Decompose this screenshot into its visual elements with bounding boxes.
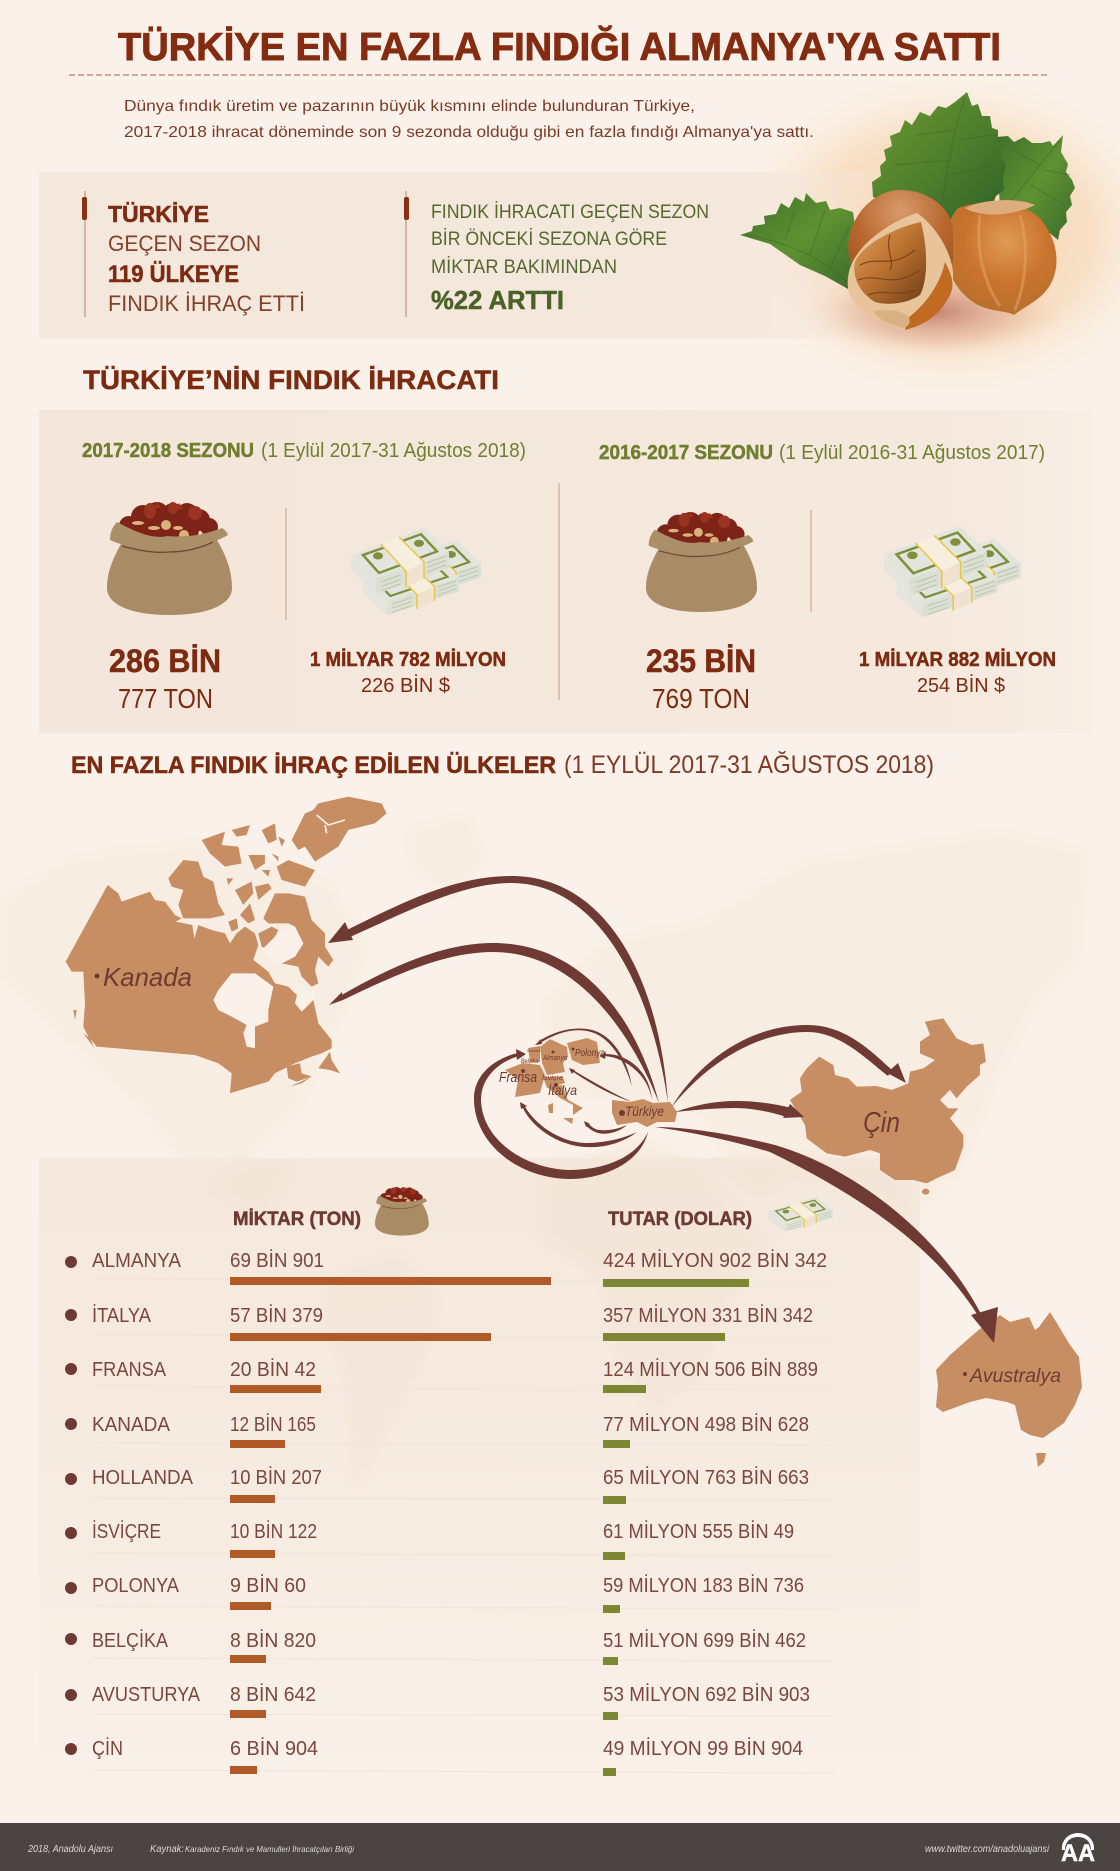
icon: money stacks [351,528,481,615]
season heading: (1 Eylül 2016-31 Ağustos 2017) [779,442,1045,464]
row: Fransa: 20 BİN 42 [230,1358,316,1381]
arrow: to Netherlands [535,1028,632,1087]
value [310,648,506,697]
label: Kanada: Kanada [103,962,192,992]
value [859,648,1056,697]
icon: sack of hazelnuts [107,502,232,615]
value: 254 BİN $ [917,674,1005,697]
arrow: to Canada 1 [328,876,668,1103]
icon: money stacks [884,526,1020,618]
decorative glow behind hazelnuts [710,60,1120,410]
row: İtalya: 57 BİN 379 [230,1304,323,1327]
row: Polonya: POLONYA [92,1575,180,1597]
row: Almanya [65,1249,833,1287]
row: Hollanda: 65 MİLYON 763 BİN 663 [603,1466,809,1489]
row: Avusturya: 8 BİN 642 [230,1683,316,1706]
country labels: Türkiye [625,1103,664,1119]
panel: seasons [39,410,1092,733]
row: Hollanda [65,1466,833,1504]
quantity: 235 BİN [646,643,756,679]
header: quantity: MİKTAR (TON) [233,1209,361,1230]
footer: copyright: 2018, Anadolu Ajansı [27,1844,113,1855]
text block: export rise: MİKTAR BAKIMINDAN [431,257,617,278]
season heading: 2017-2018 SEZONU [82,440,254,462]
quantity: 286 BİN [109,643,221,679]
arrow: to Belgium [520,1102,637,1147]
row: Almanya: ALMANYA [92,1250,182,1272]
logo: AA: AA [1061,1840,1095,1867]
country labels: Hollanda [527,1048,541,1053]
row: İsviçre: 10 BİN 122 [230,1520,317,1543]
heading: Türkiye's hazelnut exports: TÜRKİYE’NİN FINDIK İHRACATI [83,365,499,395]
row: Avusturya [65,1683,833,1720]
season heading: (1 Eylül 2017-31 Ağustos 2018) [261,440,526,462]
label: Çin: Çin [863,1107,900,1139]
text block: 119 countries: FINDIK İHRAÇ ETTİ [108,291,305,316]
row: İtalya: İTALYA [92,1304,152,1327]
table: country rows [65,1249,833,1776]
value: 226 BİN $ [361,674,450,697]
row: Avusturya: AVUSTURYA [92,1684,201,1706]
country labels: Polonya [575,1048,605,1059]
map: Canada [66,797,387,1093]
row: İsviçre: 61 MİLYON 555 BİN 49 [603,1520,794,1543]
footer [0,1823,1120,1871]
country labels: İtalya [548,1082,577,1098]
quantity: 777 TON [118,683,213,714]
country labels: Fransa [499,1069,537,1086]
season 2017-2018 [82,440,526,714]
arrow: to China north [671,1025,906,1108]
country labels: İsviçre [542,1074,563,1082]
map: Europe and Türkiye [499,1038,677,1127]
intro text: 2017-2018 ihracat döneminde son 9 sezonda olduğu gibi en fazla fındığı Almanya'ya sattı. [124,124,814,141]
heading: top destination countries [71,750,934,779]
row: Kanada: 12 BİN 165 [230,1413,316,1436]
header: quantity [233,1187,429,1236]
text block: 119 countries: 119 ÜLKEYE [108,261,239,288]
quantity [109,643,221,714]
arrow: to France, long loop [474,1049,648,1179]
heading: top destination countries: (1 EYLÜL 2017-31 AĞUSTOS 2018) [564,750,934,779]
row: Fransa [65,1358,833,1393]
row: İtalya [65,1304,833,1341]
arrow: to Poland [599,1052,652,1100]
text block: export rise: BİR ÖNCEKİ SEZONA GÖRE [431,229,667,250]
row: Hollanda: 10 BİN 207 [230,1466,322,1489]
row: Polonya: 59 MİLYON 183 BİN 736 [603,1574,804,1597]
row: Almanya: 424 MİLYON 902 BİN 342 [603,1249,827,1272]
text block: export rise: FINDIK İHRACATI GEÇEN SEZON [431,202,709,223]
country labels [499,1048,664,1119]
season heading [82,440,526,462]
panel: table background [39,1158,920,1800]
season heading: 2016-2017 SEZONU [599,442,773,464]
bays and straits [213,815,345,1048]
arrow: to Canada 2 [329,943,659,1103]
header: value: TUTAR (DOLAR) [608,1209,752,1230]
faint world map inside table panel [200,1158,920,1490]
intro text [124,98,814,141]
intro text: Dünya fındık üretim ve pazarının büyük kısmını elinde bulunduran Türkiye, [124,98,695,115]
row: Belçika: 51 MİLYON 699 BİN 462 [603,1629,806,1652]
row: Çin: 6 BİN 904 [230,1737,318,1760]
arrow: to Germany [569,1068,632,1102]
arrows from Türkiye [328,876,998,1343]
text block: export rise [404,191,709,317]
hazelnut: open shell with kernel [848,190,953,295]
table headers [233,1187,833,1236]
row: Çin: 49 MİLYON 99 BİN 904 [603,1737,803,1760]
row: Fransa: FRANSA [92,1359,167,1381]
footer: source: Kaynak: [150,1844,184,1855]
header: value [608,1197,833,1232]
value: 1 MİLYAR 782 MİLYON [310,648,506,671]
faint world map background [0,810,1090,1490]
season heading [599,442,1045,464]
row: Belçika [65,1629,833,1665]
text block: 119 countries [82,191,305,317]
title: TÜRKİYE EN FAZLA FINDIĞI ALMANYA'YA SATTI [118,25,1001,69]
arrow: to Italy [584,1121,627,1134]
country labels: Almanya [542,1055,567,1062]
hazelnut: whole [945,202,1056,315]
row: Almanya: 69 BİN 901 [230,1249,324,1272]
map: China [790,1018,986,1195]
label: Avustralya: Avustralya [969,1366,1061,1387]
panel: summary [39,172,919,339]
quantity: 769 TON [652,683,750,714]
row: Hollanda: HOLLANDA [92,1467,194,1489]
row: İtalya: 357 MİLYON 331 BİN 342 [603,1304,813,1327]
row: Polonya [65,1574,833,1613]
row: Belçika: BELÇİKA [92,1629,169,1652]
footer: twitter: www.twitter.com/anadoluajansi [925,1843,1050,1855]
quantity [646,643,756,714]
row: İsviçre [65,1520,833,1560]
row: Avusturya: 53 MİLYON 692 BİN 903 [603,1683,810,1706]
row: Kanada: KANADA [92,1414,171,1436]
text block: export rise: %22 ARTTI [431,285,564,315]
arrow: to China east [675,1101,804,1118]
row: Polonya: 9 BİN 60 [230,1574,306,1597]
row: Çin: ÇİN [92,1737,123,1760]
row: Kanada: 77 MİLYON 498 BİN 628 [603,1413,809,1436]
text block: 119 countries: GEÇEN SEZON [108,231,261,256]
text block: 119 countries: TÜRKİYE [108,201,209,227]
map: Australia [936,1312,1082,1467]
row: Çin [65,1737,833,1776]
country labels: Belçika [521,1059,539,1065]
footer: source: Karadeniz Fındık ve Mamulleri İhracatçıları Birliği [185,1844,355,1854]
row: Kanada [65,1413,833,1448]
row: İsviçre: İSVİÇRE [92,1520,161,1543]
illustration: hazelnuts and leaves [740,92,1075,360]
arrow: to Australia [655,1127,998,1343]
season 2016-2017 [599,442,1056,714]
row: Fransa: 124 MİLYON 506 BİN 889 [603,1358,818,1381]
heading: top destination countries: EN FAZLA FINDIK İHRAÇ EDİLEN ÜLKELER [71,752,556,779]
row: Belçika: 8 BİN 820 [230,1629,316,1652]
value: 1 MİLYAR 882 MİLYON [859,648,1056,671]
icon: sack of hazelnuts [646,512,757,612]
